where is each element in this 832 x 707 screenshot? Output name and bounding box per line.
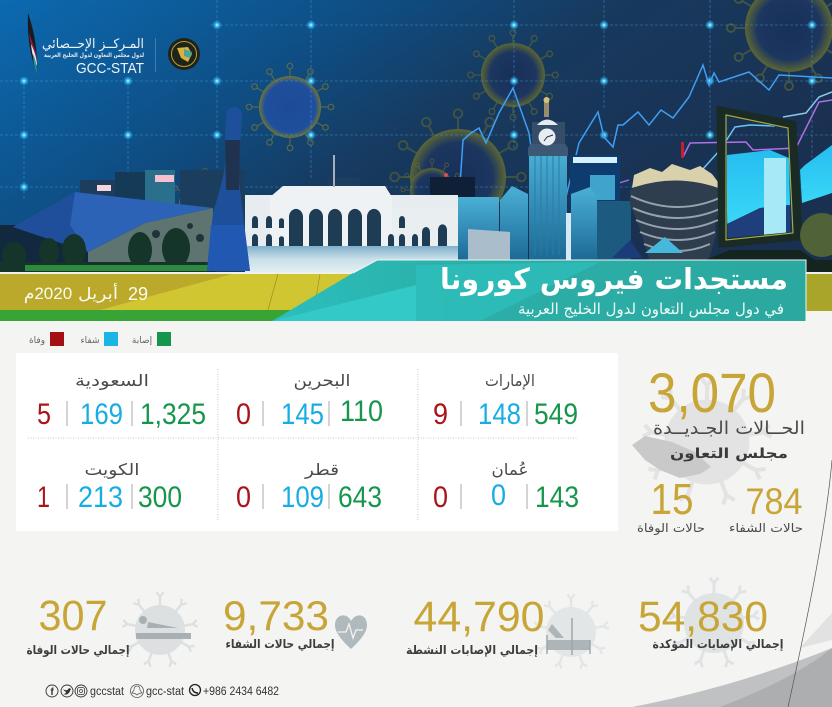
icon: virus centre [468,30,558,120]
row: Bahrain: 110 [340,395,383,428]
Kuwait cultural centre [0,192,215,272]
line chart overlays [459,65,832,200]
row: Qatar: قطر [304,460,339,480]
logo text subtitle: لدول مجلس التعاون لدول الخليج العربية [44,52,144,59]
GCC label: مجلس التعاون [670,446,788,462]
row: UAE: 9 [433,398,448,431]
row: Oman [433,460,579,514]
footer: social handles: gccstat [90,686,125,698]
stat: total deaths: إجمالي حالات الوفاة [26,643,130,658]
Gulf towers [458,97,631,260]
icon: hospital bed virus [532,594,610,670]
date text [24,283,148,304]
row: Saudi Arabia: 1,325 [140,398,206,431]
row: UAE: 549 [534,398,578,431]
footer: social handles: +986 2434 6482 [203,686,279,698]
panel: new cases GCC [632,361,805,536]
row: Kuwait: 213 [78,481,123,514]
icon: virus and map watermark [632,377,773,506]
deaths label: حالات الوفاة [637,521,705,536]
icon: virus right of palace [401,159,463,221]
legend: شفاء [80,336,100,346]
date text: 2020م [24,284,72,304]
date text: 29 [128,284,148,304]
row: Saudi Arabia: 5 [37,398,51,431]
footer: social handles: gcc-stat [146,686,185,698]
logo text arabic: المـركــز الإحــصائي [42,37,144,52]
stat: total confirmed [638,577,784,668]
icon: whatsapp [190,684,200,696]
row: Bahrain: البحرين [294,371,350,391]
stat: total active: 44,790 [414,593,544,641]
row: Saudi Arabia: السعودية [75,371,149,391]
header image: city skyline [0,0,832,272]
Bahrain circular tower [612,142,725,262]
icon: facebook: f [50,687,54,698]
new cases label: الحــالات الجـديــدة [653,418,805,439]
icon: facebook [46,685,58,698]
icon: virus top right [727,0,832,90]
row: Bahrain: 0 [236,398,251,431]
footer: social handles [46,684,279,698]
recoveries label: حالات الشفاء [729,521,803,535]
icon: virus [668,577,760,668]
stat: total active [406,593,610,670]
row: Bahrain: 145 [281,398,324,431]
row: Qatar [236,460,382,514]
decorative swoosh [632,460,832,707]
recoveries number: 784 [746,481,802,522]
legend: وفاة [29,336,45,346]
new cases number: 3,070 [648,361,776,424]
row: Kuwait: 300 [138,481,182,514]
row: Oman: 0 [491,479,506,512]
subtitle: في دول مجلس التعاون لدول الخليج العربية [518,300,784,319]
row: Kuwait: الكويت [84,460,140,480]
stat: total active: إجمالي الإصابات النشطة [406,643,538,657]
icon: virus left of tower [390,109,526,245]
row: Qatar: 643 [338,481,382,514]
icon: virus behind Kuwait building [168,168,242,242]
title banner [272,260,806,321]
row: Oman: 0 [433,481,448,514]
stat: total recoveries: إجمالي حالات الشفاء [226,637,334,651]
icon: patient in bed virus [121,592,199,668]
Dubai frame [705,111,832,272]
Oman royal opera house [245,155,458,272]
row: Qatar: 109 [281,481,324,514]
icon: heart with pulse [335,615,367,649]
row: Bahrain [236,371,383,431]
panel: country table [16,353,618,531]
logo: GCC-Stat [28,13,156,77]
date banner [0,272,832,321]
icon: instagram [75,685,87,697]
stat: total confirmed: 54,830 [638,593,768,641]
stat: total confirmed: إجمالي الإصابات المؤكدة [652,637,784,652]
date text: أبريل [78,283,118,304]
legend: إصابة [132,336,152,346]
row: Saudi Arabia: 169 [80,398,123,431]
row: Qatar: 0 [236,481,251,514]
icon: twitter [61,685,73,697]
row: UAE [433,371,578,431]
icon: GCC emblem [168,38,200,70]
icon: virus top centre [246,63,334,151]
icon: snapchat [130,684,144,698]
title: مستجدات فيروس كورونا [440,262,788,296]
Qatar torch tower [207,107,250,271]
background dark blocks [80,155,620,230]
stat: total deaths: 307 [38,592,108,640]
deaths number: 15 [650,475,694,524]
stat: total deaths [26,592,199,668]
row: UAE: الإمارات [485,371,535,391]
logo text latin: GCC-STAT [76,60,144,77]
stat: total recoveries [223,592,367,651]
stat: total recoveries: 9,733 [223,592,329,639]
row: Oman: عُمان [492,460,528,479]
row: UAE: 148 [478,398,521,431]
row: Saudi Arabia [37,371,206,431]
legend [29,332,171,346]
row: Kuwait: 1 [37,481,50,514]
row: Oman: 143 [535,481,579,514]
row: Kuwait [37,460,182,514]
